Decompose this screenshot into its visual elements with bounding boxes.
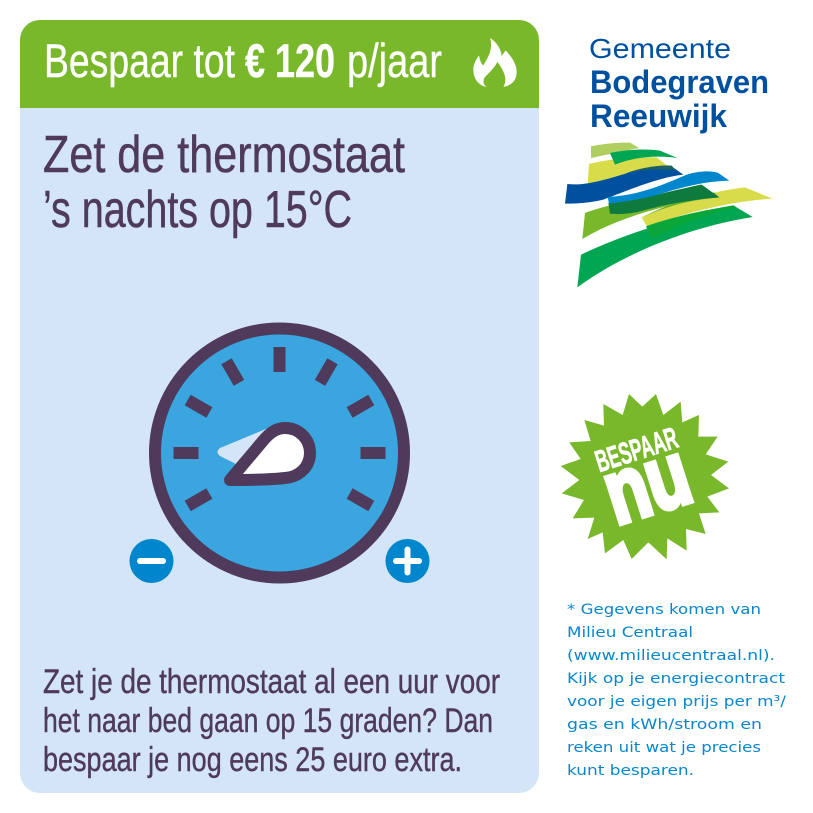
badge text: nu (592, 422, 702, 544)
footnote text: * Gegevens komen van (567, 602, 761, 618)
heading: savings: p/jaar (347, 34, 442, 87)
panel: main card (20, 20, 539, 793)
title: Zet de thermostaat (43, 126, 405, 184)
body text: het naar bed gaan op 15 graden? Dan (43, 702, 493, 740)
badge: bespaar nu (561, 394, 729, 559)
icon: flame (473, 38, 517, 87)
needle shadow (218, 424, 278, 464)
footnote text (567, 602, 786, 779)
footnote text: Kijk op je energiecontract (567, 671, 785, 687)
body text: Zet je de thermostaat al een uur voor (43, 663, 500, 701)
footnote text: Milieu Centraal (567, 625, 693, 641)
footnote text: kunt besparen. (567, 763, 694, 779)
logo emblem (565, 143, 772, 287)
icon: plus button (386, 539, 430, 583)
body text (43, 663, 500, 779)
heading: savings: € 120 (245, 34, 335, 87)
title: ’s nachts op 15°C (43, 181, 352, 239)
icon: minus button (130, 539, 174, 583)
footnote text: (www.milieucentraal.nl). (567, 648, 775, 664)
heading: savings (44, 34, 442, 87)
body text: bespaar je nog eens 25 euro extra. (43, 741, 462, 779)
logo wordmark: Gemeente (589, 33, 731, 64)
logo wordmark: Bodegraven (590, 64, 769, 100)
footnote text: voor je eigen prijs per m³/ (567, 694, 786, 710)
dial ticks (174, 347, 386, 511)
badge text: BESPAAR (591, 421, 682, 479)
starburst (561, 394, 729, 559)
icon: thermostat dial (155, 328, 404, 578)
footnote text: reken uit wat je precies (567, 740, 761, 756)
needle (230, 428, 310, 480)
heading: savings: Bespaar tot (44, 34, 235, 87)
title (43, 126, 405, 239)
logo wordmark (589, 33, 769, 134)
panel: green header (20, 20, 539, 108)
logo wordmark: Reeuwijk (590, 98, 727, 134)
logo: Gemeente Bodegraven Reeuwijk (565, 33, 772, 287)
footnote text: gas en kWh/stroom en (567, 717, 762, 733)
